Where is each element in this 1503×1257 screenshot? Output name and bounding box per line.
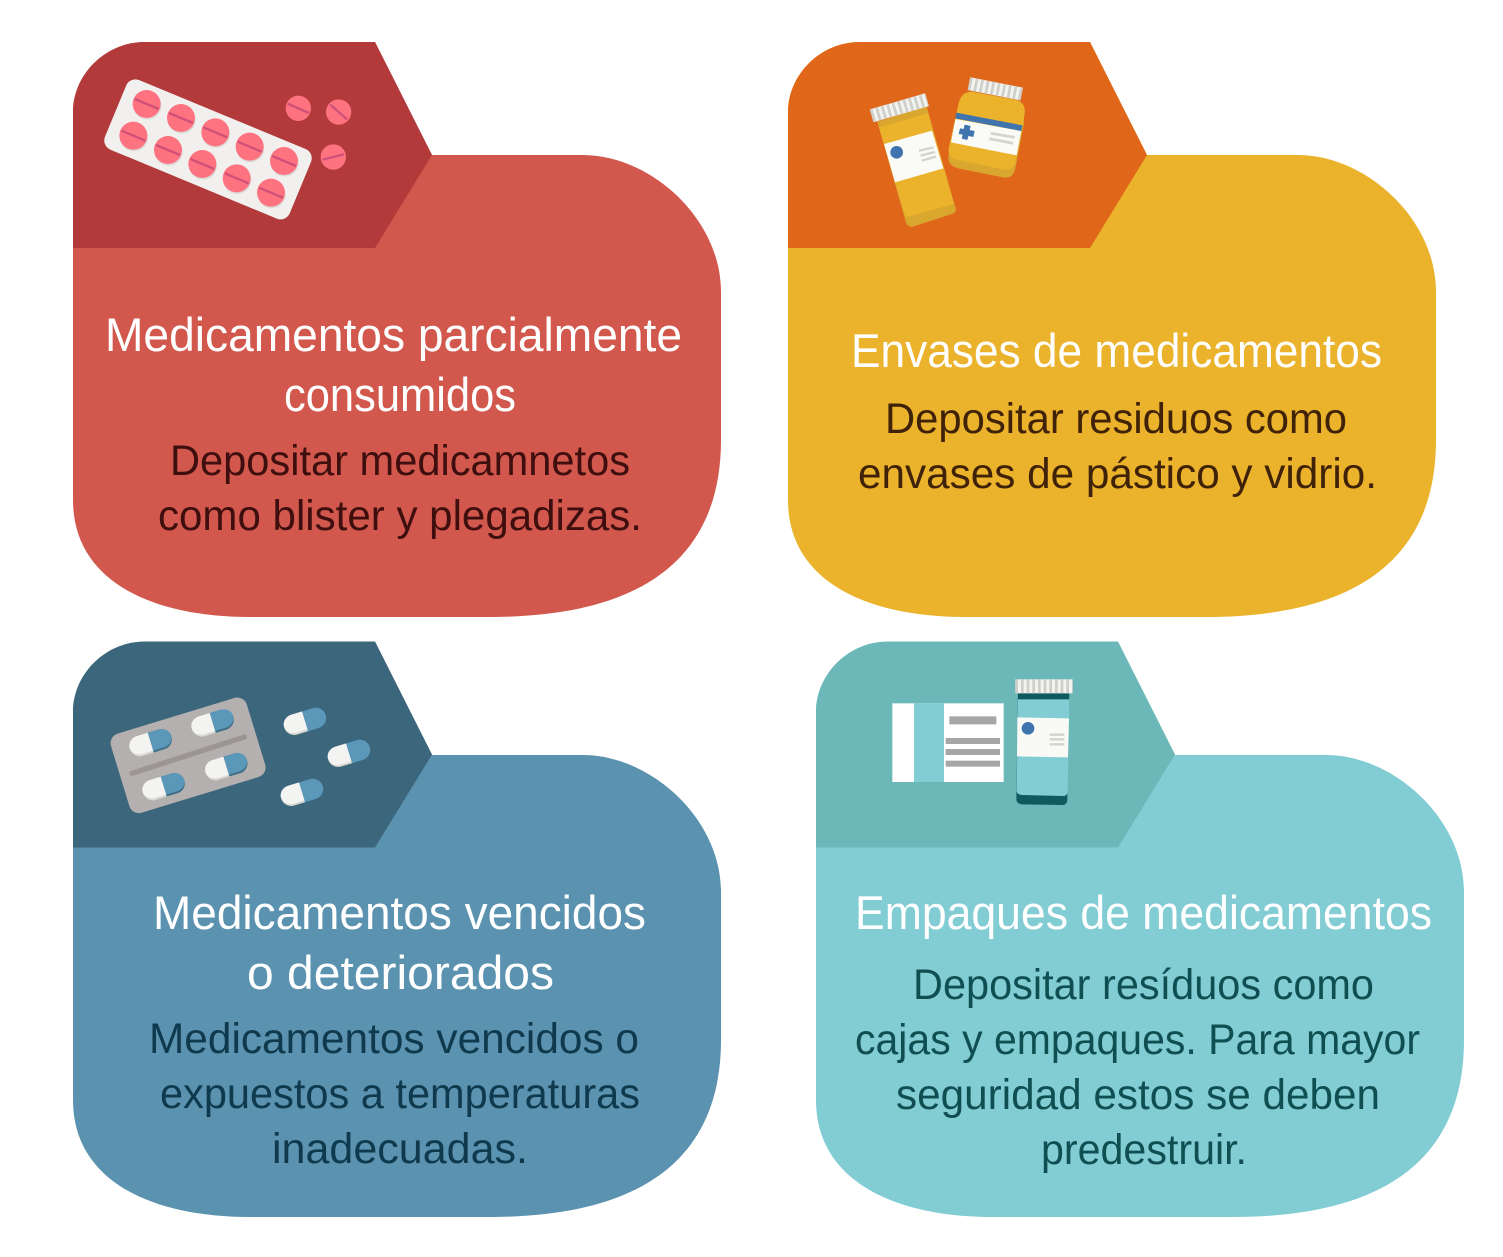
heading: consumidos — [284, 368, 516, 421]
body text: seguridad estos se deben — [896, 1071, 1380, 1119]
icon: capsules blister — [108, 695, 373, 816]
panel: medicamentos vencidos o deteriorados — [73, 642, 721, 1217]
body text: Medicamentos vencidos o — [149, 1015, 639, 1063]
card body — [816, 642, 1464, 1217]
heading: Empaques de medicamentos — [855, 886, 1432, 939]
heading: Medicamentos parcialmente — [105, 308, 682, 361]
body text: Depositar residuos como — [885, 395, 1347, 443]
body text — [158, 437, 642, 540]
body text: envases de pástico y vidrio. — [858, 450, 1377, 498]
card tab — [73, 642, 432, 848]
heading: o deteriorados — [247, 946, 554, 999]
panel: medicamentos parcialmente consumidos — [73, 42, 721, 617]
body text — [858, 395, 1377, 498]
icon: medicine bottles — [872, 84, 1025, 227]
body text: cajas y empaques. Para mayor — [855, 1016, 1420, 1064]
heading — [105, 308, 682, 421]
icon: blister of round pills — [101, 76, 351, 222]
body text — [855, 961, 1420, 1174]
body text: como blister y plegadizas. — [158, 492, 642, 540]
card tab — [788, 42, 1147, 248]
card body — [73, 42, 721, 617]
panel: envases de medicamentos — [788, 42, 1436, 617]
card tab — [816, 642, 1175, 848]
card tab — [73, 42, 432, 248]
heading — [153, 886, 646, 999]
body text: expuestos a temperaturas — [160, 1070, 640, 1118]
panel: empaques de medicamentos — [816, 642, 1464, 1217]
body text: Depositar medicamnetos — [170, 437, 630, 485]
body text — [149, 1015, 640, 1173]
heading: Medicamentos vencidos — [153, 886, 646, 939]
icon: box and bottle — [892, 679, 1073, 805]
card body — [788, 42, 1436, 617]
body text: predestruir. — [1041, 1126, 1247, 1174]
card body — [73, 642, 721, 1217]
body text: inadecuadas. — [272, 1125, 528, 1173]
heading: Envases de medicamentos — [851, 324, 1382, 377]
body text: Depositar resíduos como — [913, 961, 1374, 1009]
